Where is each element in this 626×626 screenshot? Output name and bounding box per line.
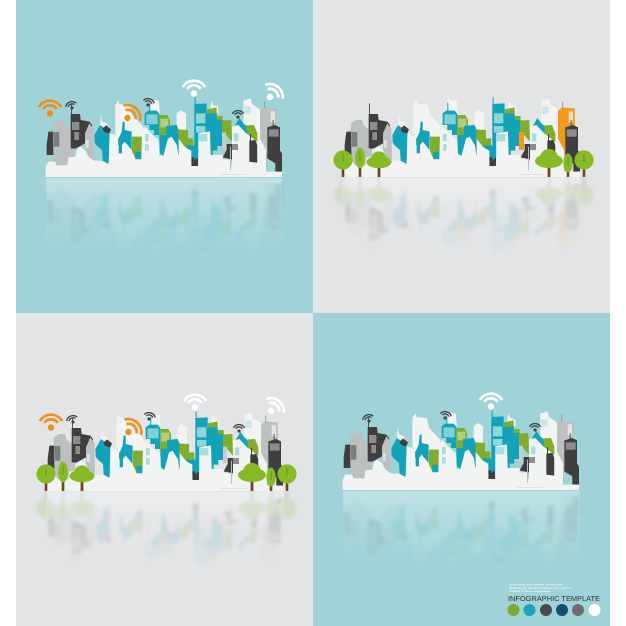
orange accent block	[519, 132, 524, 150]
icon: orange wifi left	[40, 415, 62, 431]
icon: small dark wifi 1	[65, 100, 78, 111]
icon: white wifi right	[260, 394, 288, 420]
trees: bottom-left	[36, 462, 297, 491]
panel: bottom-right teal city	[313, 313, 610, 626]
icon: small dark wifi 3	[529, 424, 541, 432]
reflection band: top-left	[46, 178, 282, 250]
skyline: top-left	[46, 96, 282, 177]
icon: small dark wifi 1	[66, 414, 79, 425]
reflection: bottom-left skyline	[36, 492, 298, 563]
panel: top-right grey city	[313, 0, 610, 313]
legend: infographic template	[508, 582, 600, 616]
small caption text	[509, 582, 572, 593]
small caption text: Lorem ipsum dolor sit amet, consectetuer	[509, 582, 562, 586]
small caption text: adipiscing elit, sed diam nonummy nibh euismod	[509, 586, 572, 590]
reflection band: bottom-left	[46, 492, 284, 532]
reflection band: top-right	[342, 178, 580, 218]
icon: orange wifi centre	[118, 415, 145, 442]
icon: white wifi top	[480, 394, 502, 410]
skyline: top-right	[344, 96, 580, 177]
icon: orange wifi left	[39, 101, 61, 117]
icon: white wifi top	[184, 395, 206, 411]
reflection: bottom-right skyline	[344, 490, 579, 552]
icon: small dark wifi 2	[143, 411, 156, 422]
skyline: bottom-left	[47, 410, 283, 491]
panel: bottom-left grey city	[16, 313, 313, 626]
icon: white wifi right	[259, 80, 287, 106]
panel: top-left teal city	[16, 0, 313, 313]
icon: small dark wifi 2	[439, 410, 452, 421]
icon: small dark wifi 1	[362, 413, 375, 424]
icon: small dark wifi 3	[232, 111, 244, 119]
colour swatches	[508, 604, 600, 616]
skyline: bottom-right	[343, 409, 579, 490]
small caption text: ut labore et dolore magna aliqua	[509, 589, 551, 593]
legend title: INFOGRAPHIC TEMPLATE	[508, 594, 600, 603]
icon: orange wifi centre	[117, 101, 144, 128]
icon: small dark wifi 3	[233, 425, 245, 433]
reflection: top-right skyline	[332, 178, 594, 249]
reflection: top-left skyline	[46, 180, 282, 240]
icon: small dark wifi 2	[142, 97, 155, 108]
icon: white wifi top	[183, 81, 205, 97]
reflection band: bottom-right	[343, 491, 580, 563]
trees: top-right	[333, 148, 594, 177]
